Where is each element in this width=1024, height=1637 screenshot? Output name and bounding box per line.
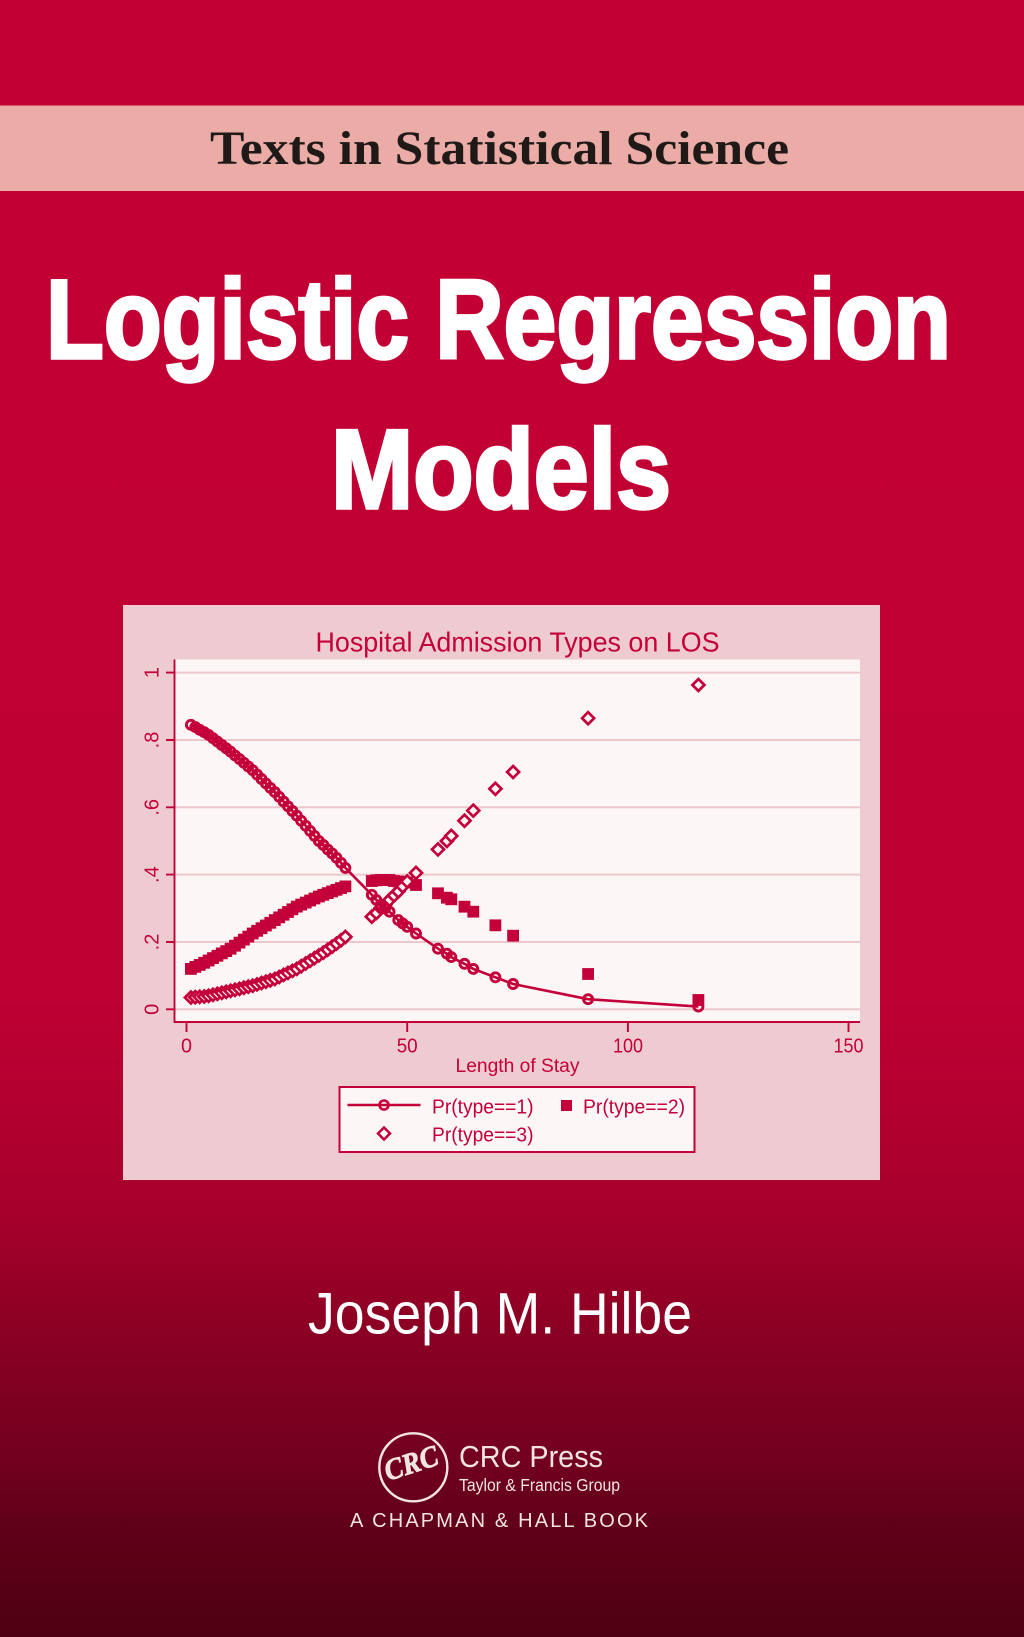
- author: Joseph M. Hilbe: [308, 1282, 692, 1346]
- legend: [340, 1087, 694, 1152]
- legend: type 3 key: Pr(type==3): [432, 1124, 534, 1146]
- y axis labels: 0: [142, 1004, 164, 1015]
- series band: [0, 106, 1024, 191]
- series title: Texts in Statistical Science: [210, 122, 789, 175]
- publisher name: CRC Press: [459, 1439, 603, 1474]
- series: Pr(type==1) line with circles: [191, 725, 698, 1007]
- panel: chart: [123, 605, 880, 1180]
- y axis labels: .6: [142, 799, 164, 816]
- x axis labels: 100: [613, 1036, 643, 1058]
- y axis labels: [142, 667, 164, 1015]
- legend: type 2 key: Pr(type==2): [583, 1096, 685, 1118]
- imprint: A CHAPMAN & HALL BOOK: [350, 1510, 649, 1532]
- axes: [166, 660, 860, 1032]
- book title: Models: [331, 407, 671, 532]
- legend: type 1 key: Pr(type==1): [432, 1096, 534, 1118]
- chart title: Hospital Admission Types on LOS: [316, 626, 720, 658]
- x axis labels: [181, 1036, 864, 1058]
- plot area: [174, 660, 860, 1022]
- x axis labels: 50: [397, 1036, 418, 1058]
- legend: type 3 key: [378, 1124, 534, 1146]
- y axis labels: .2: [142, 934, 164, 950]
- icon: CRC circle: CRC: [380, 1439, 443, 1488]
- legend: type 1 key: [348, 1096, 534, 1118]
- series: Pr(type==2) squares: [191, 880, 698, 1000]
- y axis labels: .8: [142, 732, 164, 748]
- publisher logo: [350, 1433, 649, 1532]
- x axis title: Length of Stay: [456, 1056, 580, 1077]
- y axis labels: 1: [142, 667, 164, 678]
- x axis labels: 150: [834, 1036, 864, 1058]
- y axis labels: .4: [142, 866, 164, 883]
- book title: [46, 257, 951, 532]
- publisher group: Taylor & Francis Group: [459, 1475, 620, 1495]
- x axis labels: 0: [181, 1036, 192, 1058]
- series: Pr(type==3) diamonds: [191, 685, 698, 998]
